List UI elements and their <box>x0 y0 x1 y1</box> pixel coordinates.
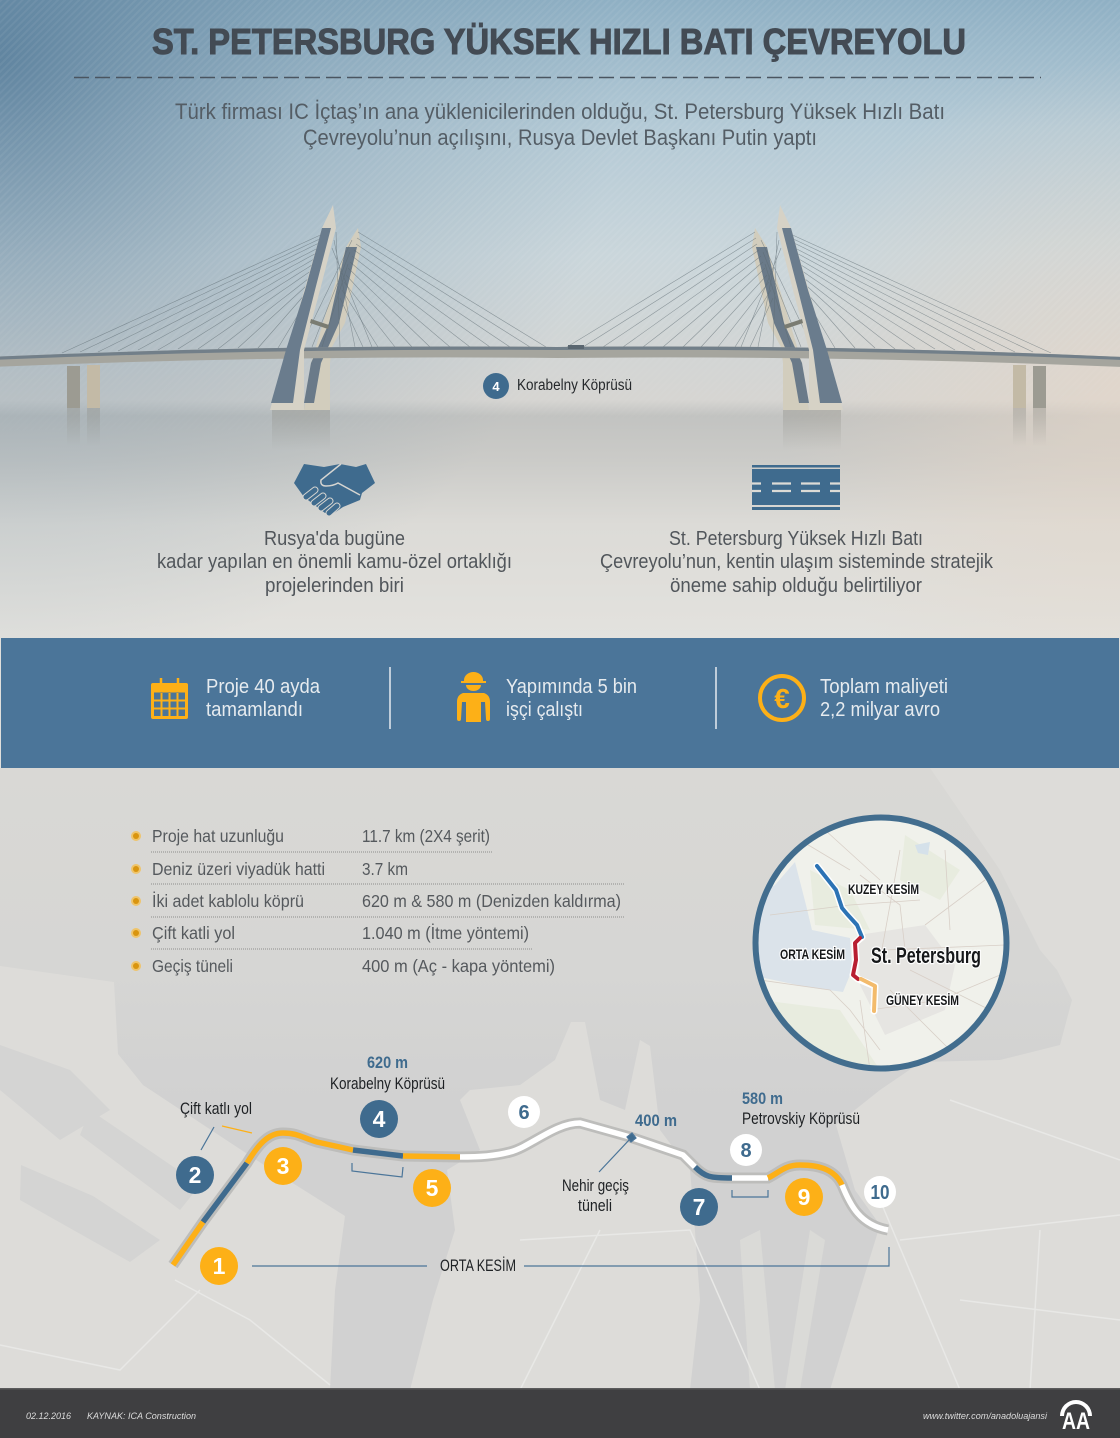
stat: total cost <box>820 676 948 721</box>
panel: key facts band <box>1 638 1119 768</box>
bridge label: Korabelny Köprüsü <box>483 373 632 399</box>
text block: partnership: Rusya'da bugüne <box>264 528 405 550</box>
footer: KAYNAK: ICA Construction <box>87 1411 196 1421</box>
number markers: 5 <box>426 1175 439 1201</box>
project facts list: 11.7 km (2X4 şerit) <box>362 826 490 846</box>
number markers: 6 <box>518 1102 530 1124</box>
bridge illustration <box>0 205 1120 450</box>
map labels: KUZEY KESİM <box>848 881 919 897</box>
footer <box>0 1388 1120 1438</box>
map labels <box>780 881 981 1008</box>
project facts list: Deniz üzeri viyadük hatti <box>152 859 325 879</box>
bridge label: Korabelny Köprüsü: Korabelny Köprüsü <box>517 377 632 394</box>
footer: www.twitter.com/anadoluajansi <box>923 1411 1048 1421</box>
locator map <box>750 815 1012 1077</box>
footer: 02.12.2016 <box>26 1411 71 1421</box>
number markers: 1 <box>213 1253 226 1279</box>
project facts list: Proje hat uzunluğu <box>152 826 284 846</box>
icon: worker <box>457 672 490 722</box>
text block: strategic importance <box>600 528 994 597</box>
stat: workforce: Yapımında 5 bin <box>506 676 637 698</box>
number markers <box>176 1096 896 1285</box>
bridge label: Korabelny Köprüsü: 4 <box>492 379 500 394</box>
project facts list: Çift katli yol <box>152 923 235 943</box>
icon: handshake <box>294 464 375 513</box>
subtitle: Türk firması IC İçtaş’ın ana yüklenicilerinden olduğu, St. Petersburg Yüksek Hızlı Batı <box>175 99 945 124</box>
number markers: 2 <box>189 1162 201 1188</box>
route labels <box>180 1054 860 1275</box>
route diagram <box>173 1054 896 1285</box>
route labels: Petrovskiy Köprüsü <box>742 1110 860 1128</box>
icon: calendar <box>151 678 188 719</box>
route labels: 400 m <box>635 1112 677 1130</box>
project facts list: İki adet kablolu köprü <box>152 891 304 911</box>
route labels: 580 m <box>742 1090 783 1108</box>
logo: AA <box>1060 1400 1092 1435</box>
stat: total cost: Toplam maliyeti <box>820 676 948 698</box>
stat: workforce <box>506 676 637 721</box>
number markers: 10 <box>870 1182 890 1204</box>
project facts list <box>131 826 624 976</box>
text block: partnership <box>157 528 512 597</box>
stat: project duration: Proje 40 ayda <box>206 676 321 698</box>
project facts list: 1.040 m (İtme yöntemi) <box>362 923 529 943</box>
number markers: 3 <box>277 1153 289 1179</box>
map labels: St. Petersburg <box>871 943 981 968</box>
tunnel marker and leader lines <box>201 1126 889 1266</box>
text block: strategic importance: öneme sahip olduğu belirtiliyor <box>670 575 922 597</box>
project facts list: 620 m & 580 m (Denizden kaldırma) <box>362 891 621 911</box>
route labels: Çift katlı yol <box>180 1100 252 1118</box>
icon: euro coin: € <box>774 683 790 714</box>
text block: partnership: projelerinden biri <box>265 575 404 597</box>
background: sky and water <box>0 0 1120 640</box>
subtitle <box>175 99 945 150</box>
route labels: ORTA KESİM <box>440 1256 516 1275</box>
project facts list: 400 m (Aç - kapa yöntemi) <box>362 956 555 976</box>
stat: project duration <box>206 676 321 721</box>
number markers: 4 <box>373 1106 386 1132</box>
stat: total cost: 2,2 milyar avro <box>820 699 940 721</box>
background: street map <box>0 768 1120 1390</box>
route labels: 620 m <box>367 1054 408 1072</box>
map route: three sections <box>817 866 875 1011</box>
number markers: 7 <box>693 1194 705 1220</box>
icon: euro coin <box>760 676 804 720</box>
text block: strategic importance: Çevreyolu’nun, kentin ulaşım sisteminde stratejik <box>600 551 994 573</box>
icon: road <box>752 465 840 510</box>
project facts list: 3.7 km <box>362 859 408 879</box>
route labels: tüneli <box>578 1197 612 1215</box>
route labels: Nehir geçiş <box>562 1177 629 1195</box>
stat: project duration: tamamlandı <box>206 699 303 721</box>
text block: strategic importance: St. Petersburg Yüksek Hızlı Batı <box>669 528 923 550</box>
number markers: 8 <box>740 1140 752 1162</box>
text block: partnership: kadar yapılan en önemli kamu-özel ortaklığı <box>157 551 512 573</box>
route line with segments <box>173 1123 888 1265</box>
project facts list: Geçiş tüneli <box>152 956 233 976</box>
map labels: GÜNEY KESİM <box>886 992 959 1008</box>
route labels: Korabelny Köprüsü <box>330 1075 445 1093</box>
number markers: 9 <box>798 1184 810 1210</box>
title: ST. PETERSBURG YÜKSEK HIZLI BATI ÇEVREYOLU <box>152 21 966 62</box>
map labels: ORTA KESİM <box>780 946 845 962</box>
subtitle: Çevreyolu’nun açılışını, Rusya Devlet Başkanı Putin yaptı <box>303 125 817 150</box>
stat: workforce: işçi çalıştı <box>506 699 583 721</box>
logo: AA: AA <box>1062 1408 1090 1435</box>
